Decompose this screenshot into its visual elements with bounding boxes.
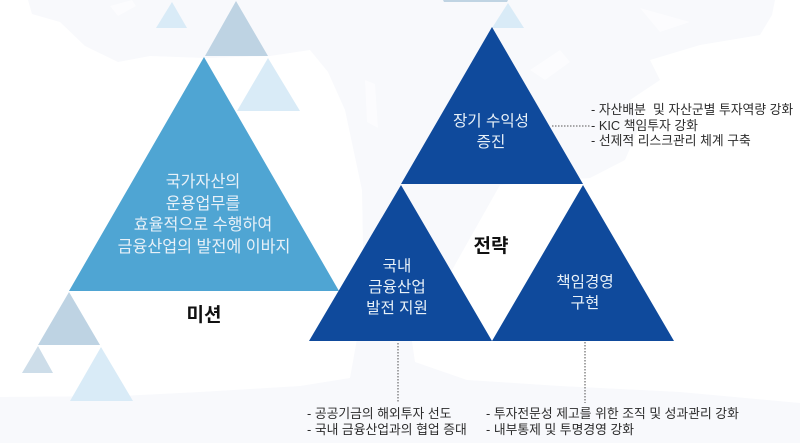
list: domestic: - 공공기금의 해외투자 선도	[307, 406, 452, 421]
list: returns	[591, 102, 793, 148]
heading: mission: 미션	[187, 304, 221, 326]
strategy triangle: domestic finance support: 발전 지원	[366, 299, 428, 317]
list: management: - 투자전문성 제고를 위한 조직 및 성과관리 강화	[486, 406, 739, 421]
list: returns: - 자산배분 및 자산군별 투자역량 강화	[591, 102, 793, 117]
heading: strategy: 전략	[474, 235, 508, 257]
strategy triangle: domestic finance support: 국내	[383, 257, 411, 275]
mission text: 금융산업의 발전에 이바지	[118, 238, 290, 256]
strategy triangle: domestic finance support: 금융산업	[368, 278, 426, 296]
strategy triangle: responsible management	[492, 185, 674, 341]
strategy triangle: responsible management: 책임경영	[556, 273, 614, 291]
strategy triangle: long-term returns: 장기 수익성	[453, 112, 529, 130]
connector: management	[584, 342, 586, 403]
mission text: 효율적으로 수행하여	[134, 216, 272, 234]
connector: domestic	[397, 343, 399, 403]
strategy triangle: responsible management: 구현	[571, 294, 599, 312]
list: returns: - KIC 책임투자 강화	[591, 118, 698, 133]
list: returns: - 선제적 리스크관리 체계 구축	[591, 133, 751, 148]
connector: returns	[552, 125, 591, 127]
list: management: - 내부통제 및 투명경영 강화	[486, 422, 634, 437]
strategy triangle: long-term returns	[401, 27, 583, 184]
strategy triangle: domestic finance support	[309, 185, 492, 341]
mission triangle	[69, 57, 339, 291]
strategy triangle: long-term returns: 증진	[477, 133, 505, 151]
mission text	[118, 173, 290, 256]
mission text: 국가자산의	[166, 173, 240, 191]
list: domestic: - 국내 금융산업과의 협업 증대	[307, 422, 467, 437]
list: domestic	[307, 406, 467, 437]
mission text: 운용업무를	[166, 195, 240, 213]
list: management	[486, 406, 739, 437]
decorative triangles	[22, 0, 524, 401]
